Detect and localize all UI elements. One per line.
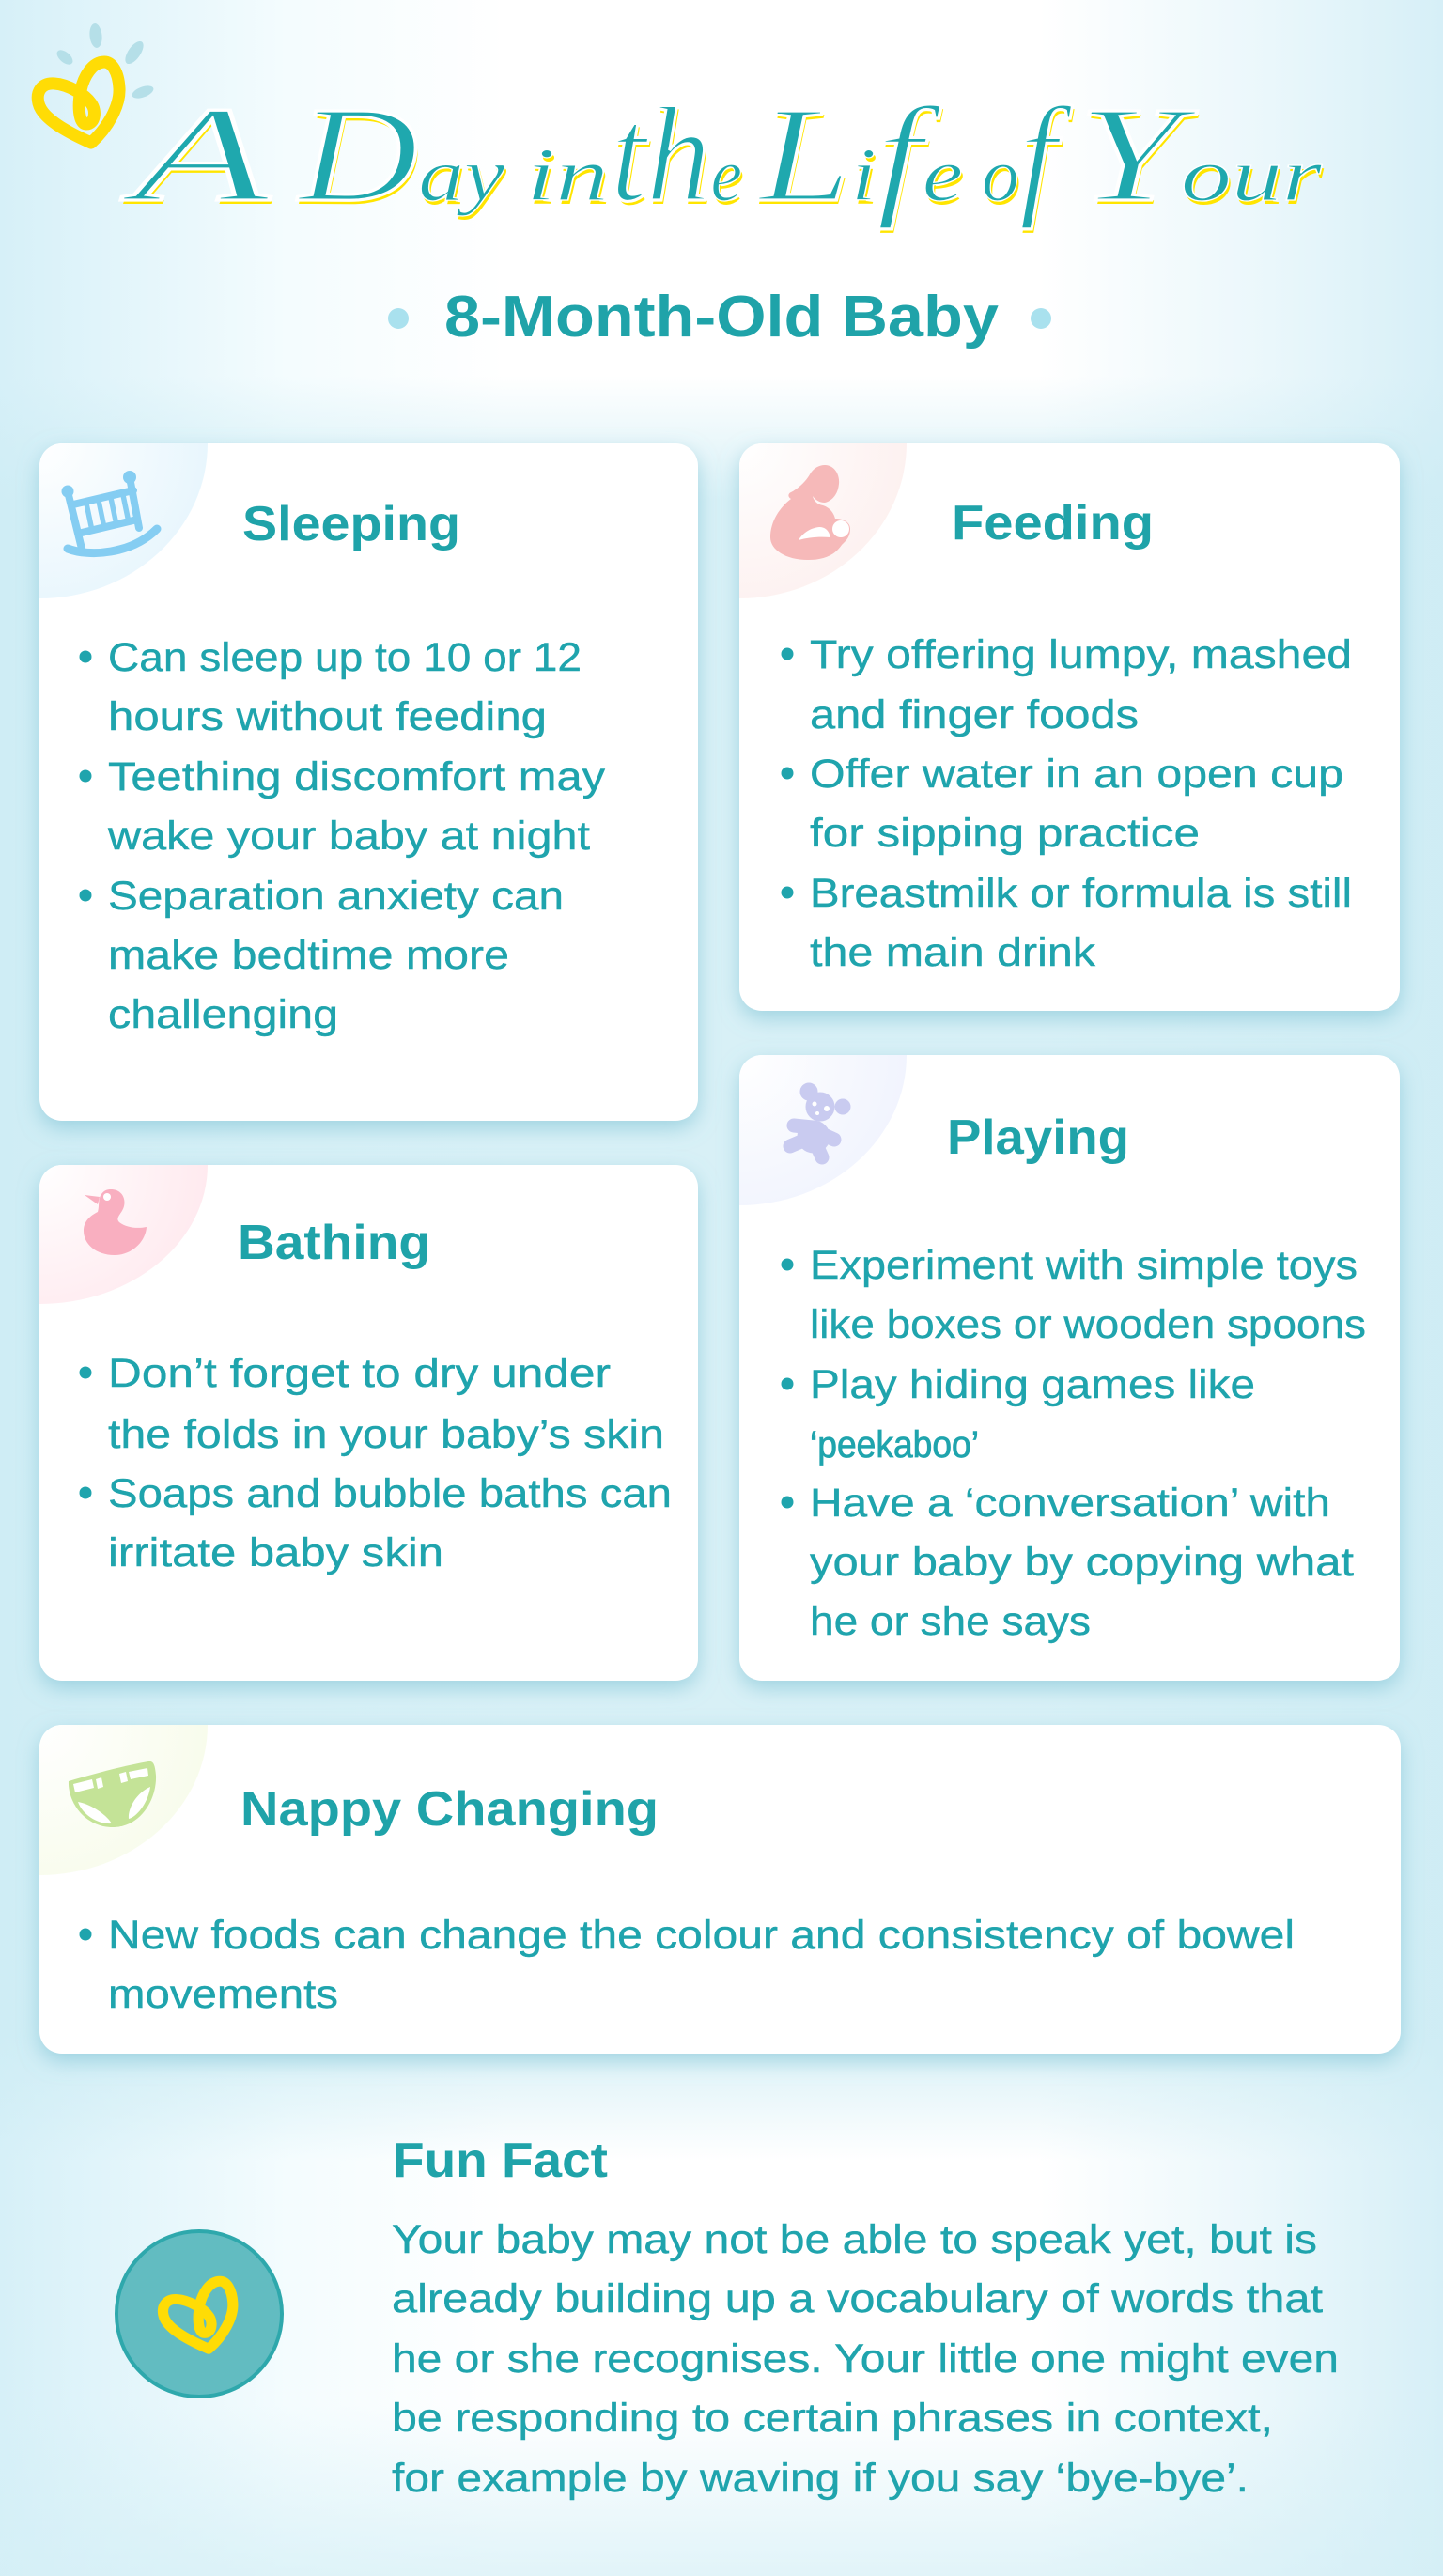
list: feeding tips: Breastmilk or formula is still	[810, 871, 1352, 916]
list: nappy tips	[79, 1913, 1295, 2017]
list: bathing tips: Don’t forget to dry under	[108, 1351, 611, 1396]
list: sleeping tips: make bedtime more	[108, 933, 509, 978]
icon: mother nursing baby	[770, 465, 850, 560]
list: playing tips: your baby by copying what	[810, 1540, 1354, 1585]
heading: bathing: Bathing	[238, 1216, 430, 1270]
panel: nappy changing	[30, 1722, 1410, 2072]
title: of	[984, 84, 1075, 234]
title: of	[982, 80, 1073, 230]
title: A	[121, 80, 272, 230]
text block: fun fact: already building up a vocabulary of words that	[392, 2276, 1323, 2321]
list: playing tips: he or she says	[810, 1599, 1091, 1644]
title: Life	[759, 84, 965, 234]
text block: fun fact: Your baby may not be able to speak yet, but is	[392, 2217, 1317, 2262]
list: sleeping tips: Teething discomfort may	[108, 754, 606, 799]
list: feeding tips: Try offering lumpy, mashed	[810, 632, 1352, 677]
list: playing tips: Have a ‘conversation’ with	[810, 1481, 1330, 1526]
text block: fun fact: he or she recognises. Your little one might even	[392, 2336, 1339, 2382]
list: feeding tips	[782, 632, 1352, 975]
list: feeding tips: the main drink	[810, 930, 1096, 975]
title: D ay	[299, 84, 507, 234]
list: feeding tips: Offer water in an open cup	[810, 752, 1343, 797]
heading: feeding: Feeding	[952, 496, 1154, 551]
list: nappy tips: movements	[108, 1972, 338, 2017]
list: sleeping tips: challenging	[108, 992, 338, 1037]
logo: yellow heart with droplets	[38, 23, 155, 143]
title: A	[123, 84, 273, 234]
panel: feeding	[729, 440, 1410, 1029]
list: playing tips: Experiment with simple toys	[810, 1243, 1358, 1288]
list: sleeping tips: Can sleep up to 10 or 12	[108, 635, 582, 680]
icon: nappy	[69, 1761, 156, 1827]
title	[121, 80, 1325, 234]
title: Y our	[1078, 80, 1323, 230]
title: Life	[757, 80, 963, 230]
title: in	[526, 134, 609, 217]
icon: fun fact heart badge	[116, 2231, 282, 2397]
title: the	[613, 84, 744, 234]
text block: fun fact	[392, 2217, 1339, 2501]
title: in	[528, 138, 611, 221]
list: bathing tips	[79, 1351, 672, 1575]
text block: fun fact: be responding to certain phrases in context,	[392, 2396, 1273, 2441]
list: playing tips	[782, 1243, 1366, 1644]
heading: playing: Playing	[947, 1110, 1129, 1165]
list: bathing tips: Soaps and bubble baths can	[108, 1471, 672, 1516]
title: the	[611, 80, 742, 230]
list: feeding tips: and finger foods	[810, 692, 1139, 737]
panel: playing	[729, 1052, 1409, 1699]
icon: rubber duck	[84, 1189, 147, 1255]
subtitle: 8-Month-Old Baby	[444, 285, 1000, 349]
heading: nappy changing: Nappy Changing	[240, 1782, 659, 1837]
list: playing tips: like boxes or wooden spoons	[810, 1302, 1366, 1347]
list: sleeping tips: Separation anxiety can	[108, 874, 564, 919]
panel: bathing	[30, 1162, 708, 1699]
panel: sleeping	[29, 440, 708, 1139]
list: nappy tips: New foods can change the colour and consistency of bowel	[108, 1913, 1295, 1958]
heading: fun fact: Fun Fact	[393, 2134, 608, 2188]
list: feeding tips: for sipping practice	[810, 811, 1200, 856]
title: Y our	[1080, 84, 1325, 234]
icon: teddy bear	[790, 1083, 850, 1157]
list: sleeping tips: wake your baby at night	[107, 814, 590, 859]
title: D ay	[297, 80, 505, 230]
list: bathing tips: irritate baby skin	[108, 1530, 443, 1575]
list: bathing tips: the folds in your baby’s skin	[108, 1412, 664, 1457]
list: playing tips: ‘peekaboo’	[810, 1424, 979, 1466]
list: playing tips: Play hiding games like	[810, 1362, 1255, 1407]
text block: fun fact: for example by waving if you say ‘bye-bye’.	[392, 2456, 1249, 2501]
list: sleeping tips	[79, 635, 606, 1037]
heading: sleeping: Sleeping	[242, 497, 460, 551]
list: sleeping tips: hours without feeding	[108, 694, 547, 739]
icon: rocking crib	[62, 471, 157, 553]
